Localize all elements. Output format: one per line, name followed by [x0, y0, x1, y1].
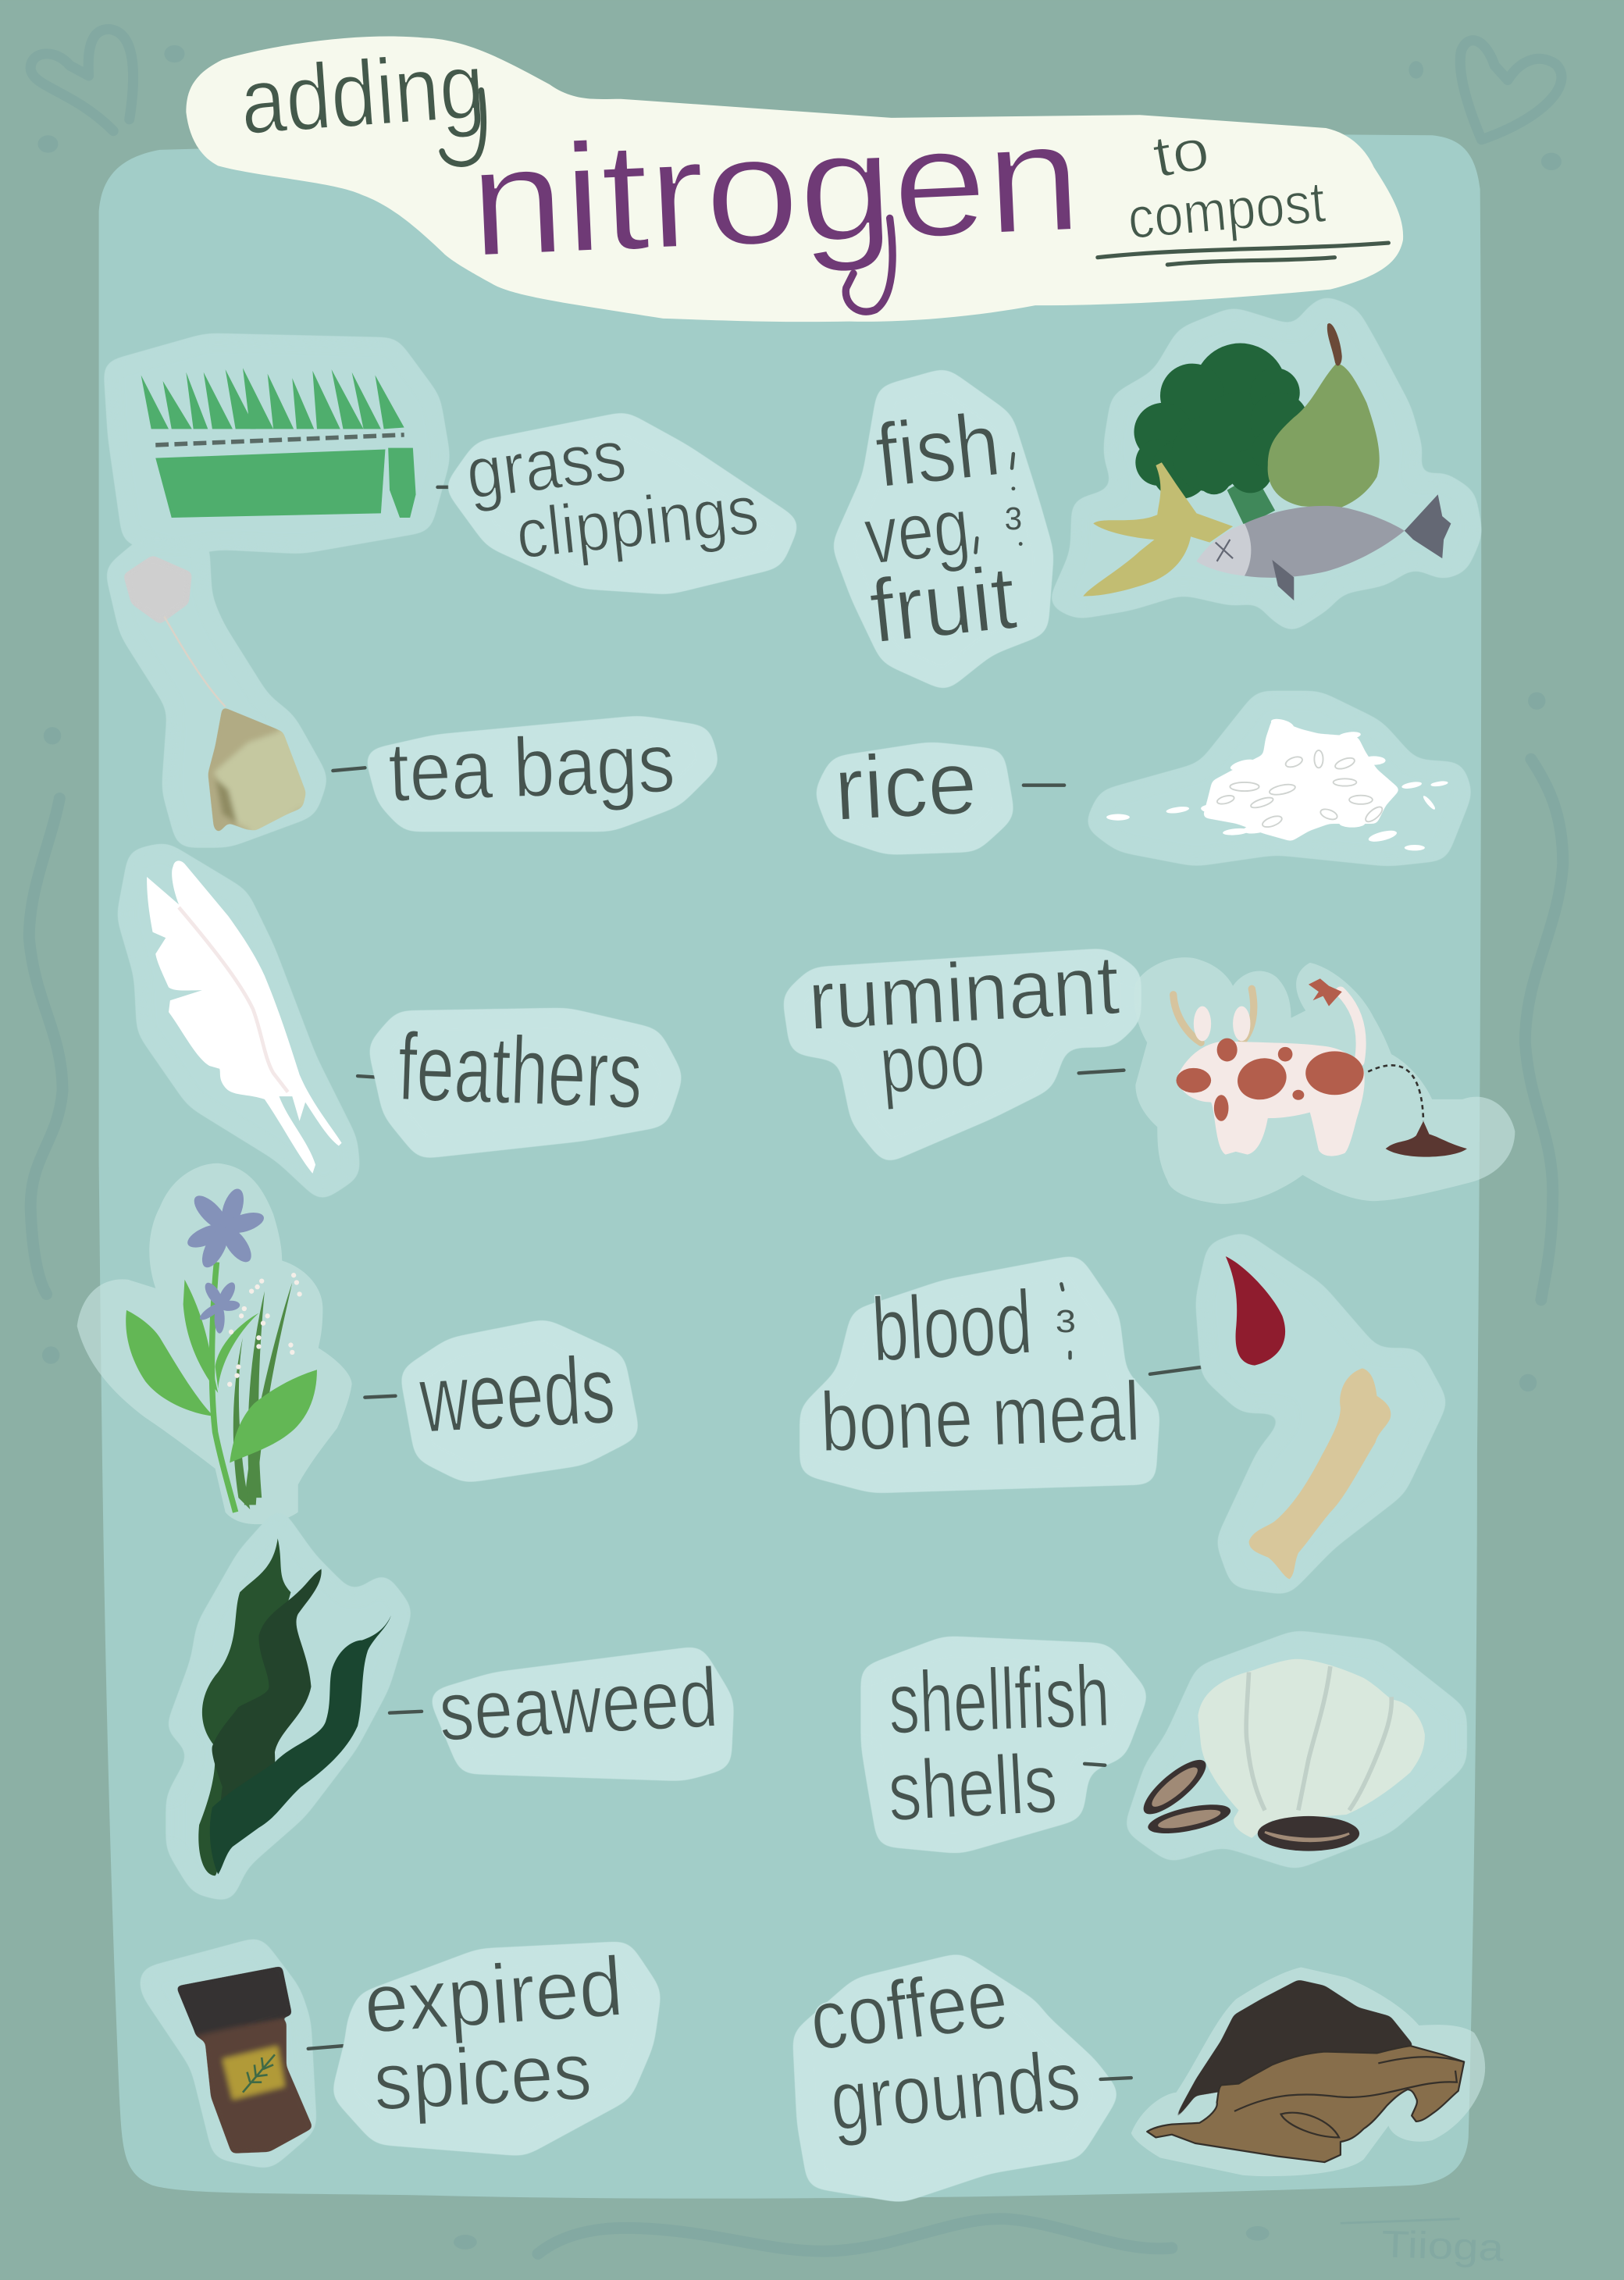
label text: coffee	[805, 1950, 1013, 2068]
leader line	[358, 1076, 381, 1078]
label blob	[375, 1015, 676, 1152]
icon: poo	[1386, 1121, 1467, 1157]
label text: grounds	[826, 2032, 1084, 2148]
label text: tea bags	[387, 714, 676, 819]
halo: coffee	[1131, 1968, 1485, 2176]
item: weeds	[77, 1163, 632, 1524]
icon: pear	[1268, 323, 1380, 509]
leader line	[1084, 1764, 1105, 1765]
label text	[860, 394, 1023, 662]
icon: spice sprig	[243, 2054, 275, 2093]
label blob	[800, 1960, 1113, 2196]
label blob	[436, 1653, 727, 1774]
label text: weeds	[417, 1336, 618, 1453]
label blob	[868, 1643, 1141, 1847]
icon: broccoli	[1134, 344, 1309, 526]
label text: grass	[461, 414, 630, 515]
leader line	[333, 768, 365, 771]
label blob	[372, 723, 712, 825]
item: coffee grounds	[800, 1950, 1485, 2196]
item: rice	[821, 696, 1467, 860]
leader line	[1150, 1366, 1204, 1374]
leader line	[1101, 2078, 1131, 2079]
item: grass clippings	[109, 339, 792, 587]
icon: large shell	[1198, 1659, 1425, 1838]
label text: expired	[361, 1938, 626, 2050]
label text: fish	[871, 394, 1005, 507]
item: seaweed	[172, 1514, 727, 1896]
label text: shells	[885, 1735, 1060, 1838]
icon: fish	[1197, 494, 1451, 600]
halo: seaweed	[172, 1514, 407, 1896]
item: expired spices	[145, 1938, 654, 2164]
icon: coffee sack	[1147, 2046, 1464, 2162]
icon: white buds	[227, 1273, 302, 1387]
halo: grass	[109, 339, 445, 553]
icon: sack folds	[1234, 2057, 1464, 2137]
main panel	[99, 131, 1481, 2199]
title background blob	[186, 37, 1403, 322]
item: tea bags	[111, 541, 712, 842]
label text: 3	[1005, 501, 1022, 536]
label text: bone meal	[819, 1363, 1141, 1469]
item: shellfish shells	[868, 1636, 1461, 1864]
icon: seaweed fronds	[198, 1538, 391, 1876]
label text: clippings	[512, 470, 762, 573]
icon: blue flowers	[184, 1186, 266, 1334]
word: adding: adding	[237, 34, 488, 154]
halo: food pile	[1054, 301, 1477, 627]
halo: rice	[1091, 696, 1467, 860]
label text: ruminant	[806, 937, 1121, 1047]
label text: veg	[860, 481, 974, 582]
label blob	[839, 376, 1047, 683]
icon: mussels	[1136, 1751, 1359, 1851]
halo: feather	[122, 848, 354, 1195]
label text: fruit	[865, 547, 1020, 662]
halo: shells	[1130, 1636, 1461, 1864]
label text	[805, 1950, 1084, 2148]
icon: cut line	[155, 435, 404, 445]
label blob	[452, 419, 792, 587]
halo: blood and bone	[1201, 1238, 1442, 1589]
icon: tea bag	[208, 707, 305, 833]
label text: blood	[870, 1271, 1035, 1380]
label blob	[407, 1326, 632, 1476]
leader line	[1024, 784, 1064, 786]
leader line	[365, 1396, 395, 1398]
label text: seaweed	[436, 1649, 720, 1758]
label blob	[789, 956, 1134, 1156]
icon: rice pile	[1106, 717, 1448, 850]
icon: tea string	[164, 617, 226, 707]
icon: cow	[1173, 978, 1467, 1157]
icon: weed stem and blades	[126, 1186, 317, 1512]
signature	[1341, 2219, 1505, 2270]
label text: feathers	[396, 1014, 644, 1129]
leader line	[308, 2046, 343, 2049]
item: blood and bone meal	[807, 1238, 1442, 1589]
label text: spices	[372, 2026, 594, 2128]
compost underline	[1098, 243, 1388, 265]
label text: 3	[1056, 1303, 1076, 1339]
label text	[885, 1647, 1111, 1838]
halo: weeds	[77, 1163, 352, 1524]
icon: banana peel	[1083, 462, 1233, 597]
label blob	[339, 1948, 654, 2149]
icon: bone	[1249, 1368, 1391, 1579]
item: ruminant poo	[789, 937, 1515, 1204]
icon: tea tag	[126, 558, 189, 621]
label text: shellfish	[887, 1647, 1111, 1752]
icon: feather	[147, 860, 342, 1174]
icon: coffee mound	[1172, 1980, 1413, 2125]
icon: weed leaves	[126, 1280, 317, 1462]
signature: Tiioga	[1381, 2223, 1505, 2270]
label text: rice	[832, 732, 979, 839]
word: nitrogen: nitrogen	[466, 90, 1084, 289]
title	[186, 34, 1403, 322]
icon: spice jar	[176, 1966, 311, 2152]
icon: poo drop arc	[1368, 1065, 1423, 1121]
label text: poo	[876, 1012, 988, 1111]
label text	[819, 1271, 1141, 1469]
label text	[361, 1938, 626, 2128]
icon: grass side	[388, 448, 416, 518]
icon: grass block	[155, 449, 385, 518]
label text	[806, 937, 1121, 1111]
label blob	[807, 1262, 1153, 1486]
icon: blood drop	[1226, 1256, 1285, 1366]
item: fish veg fruit	[839, 301, 1477, 683]
word: to: to	[1149, 116, 1214, 190]
leader line	[1079, 1071, 1124, 1073]
leader line	[438, 486, 452, 488]
word: compost: compost	[1125, 169, 1328, 251]
item: feathers	[122, 848, 676, 1195]
leader line	[390, 1712, 422, 1713]
halo: cow	[1134, 957, 1515, 1204]
halo: spice jar	[145, 1943, 311, 2164]
halo: tea bag	[111, 541, 322, 842]
label text	[461, 414, 762, 573]
label blob	[821, 749, 1007, 848]
icon: grass blades	[141, 368, 416, 518]
